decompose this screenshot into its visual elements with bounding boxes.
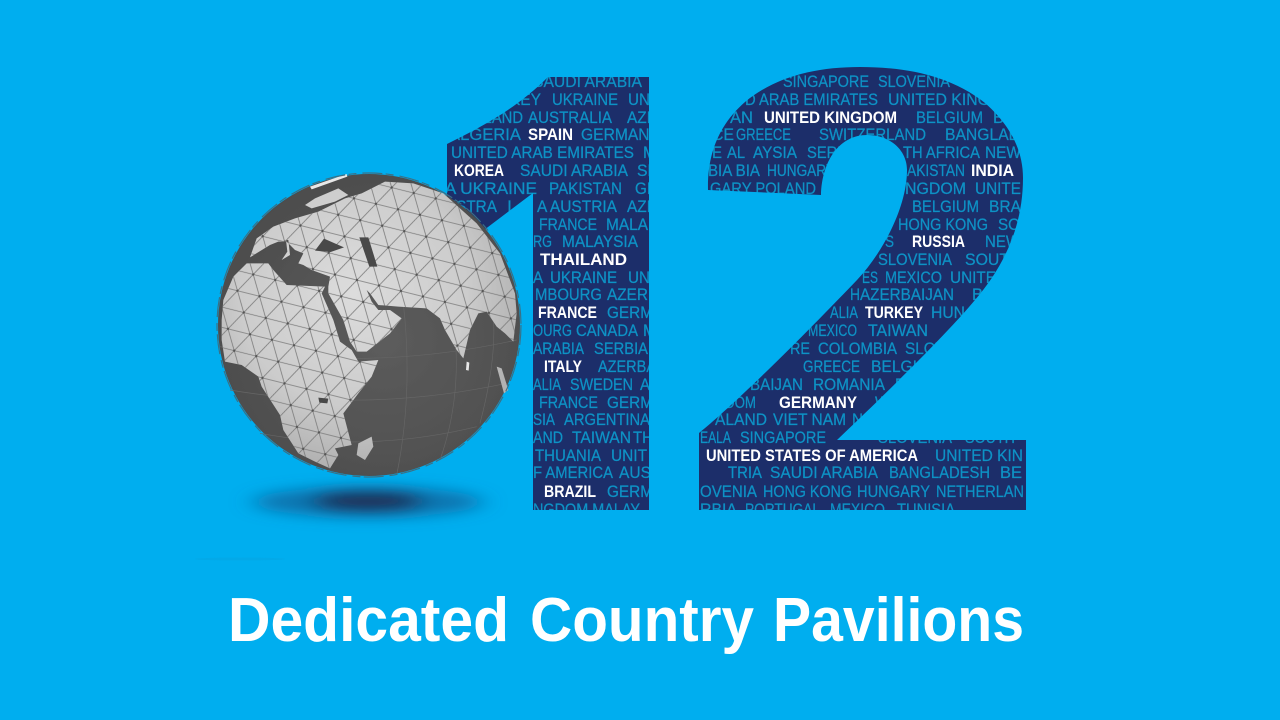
numeral 1 filled with country names: AZE — [627, 109, 657, 127]
numeral 2 filled with country names: SOUTH — [965, 429, 1015, 447]
numeral 2 filled with country names: NEW — [985, 233, 1020, 251]
numeral 1 filled with country names: FRANCE — [539, 394, 598, 412]
numeral 2 filled with country names: BANGLAD — [945, 126, 1020, 144]
numeral 2 filled with country names: SWITZERLAND — [819, 126, 926, 144]
numeral 2 filled with country names: BRA — [989, 198, 1021, 216]
numeral 1 filled with country names: RG — [533, 233, 552, 251]
numeral 1 filled with country names: M — [643, 144, 656, 162]
numeral 2 filled with country names: AN — [730, 109, 753, 127]
numeral 2 filled with country names: SLOVENIA — [878, 251, 952, 269]
numeral 2 filled with country names: SOUT — [965, 251, 1009, 269]
numeral 2 filled with country names: AYSIA — [753, 144, 797, 162]
numeral 1 filled with country names: CANADA — [576, 322, 638, 340]
numeral 2 filled with country names: GREECE — [736, 126, 791, 144]
numeral 2 filled with country names: SLOVENIA — [878, 429, 952, 447]
numeral 1 filled with country names: GERM — [607, 394, 653, 412]
numeral 2 filled with country names: PORTUGAL — [745, 501, 820, 519]
numeral 1 filled with country names: ALIA — [533, 376, 561, 394]
numeral 1 filled with country names: SERBIA — [594, 340, 648, 358]
numeral 1 filled with country names: TAIWAN — [572, 429, 631, 447]
numeral 2 filled with country names: MEXICO — [808, 322, 857, 340]
numeral 2 filled with country names: BELGIUM — [916, 109, 983, 127]
numeral 2 filled with country names: AKISTAN — [907, 162, 965, 180]
numeral 1 filled with country names: AZER — [607, 286, 648, 304]
numeral 1 filled with country names: AND — [533, 429, 563, 447]
globe — [217, 173, 521, 477]
numeral 1 filled with country names: FRANCE — [538, 304, 597, 322]
numeral 2 filled with country names: NGDOM — [905, 180, 966, 198]
numeral 1 filled with country names: FRANCE — [539, 216, 597, 234]
numeral 1 filled with country names: NGDOM MALAY — [533, 501, 640, 519]
numeral 2 filled with country names: UNITED KIN — [935, 447, 1023, 465]
numeral 2 filled with country names: SERBIA — [807, 144, 861, 162]
title — [228, 585, 1024, 655]
numeral 2 filled with country names: OVENIA — [700, 483, 757, 501]
numeral 2 filled with country names: BE — [1000, 464, 1022, 482]
numeral 2 filled with country names: TH AFRICA — [903, 144, 980, 162]
numeral 1 filled with country names: TH — [633, 429, 653, 447]
numeral 2 filled with country names: BELGI — [871, 358, 917, 376]
numeral 1 filled with country names: AUSTRALIA — [528, 109, 612, 127]
numeral 2 filled with country names: MEXICO — [885, 269, 942, 287]
numeral 2 filled with country names: UNITED KING — [888, 91, 990, 109]
numeral 1 filled with country names: GERMANY — [581, 126, 660, 144]
numeral 2 filled with country names: GERMANY — [779, 394, 857, 412]
numeral 2 filled with country names: CE — [712, 126, 734, 144]
numeral 2 filled with country names: TURKEY — [865, 304, 923, 322]
numeral 2 filled with country names: TAIWAN — [868, 322, 928, 340]
numeral 2 filled with country names: SINGAPORE — [740, 429, 826, 447]
numeral 1 filled with country names: UNIT — [611, 447, 647, 465]
numeral 1 filled with country names: AZE — [627, 198, 657, 216]
numeral 1 filled with country names: MALAYSIA — [562, 233, 638, 251]
numeral 1 filled with country names: GERM — [607, 483, 653, 501]
title: Pavilions — [773, 585, 1024, 655]
title: Country — [530, 585, 754, 655]
numeral 2 filled with country names: HUNGARY — [767, 162, 835, 180]
numeral 2 filled with country names: S — [885, 233, 894, 251]
numeral 2 filled with country names: BELGIUM — [912, 198, 979, 216]
numeral 2 filled with country names: RE — [790, 340, 810, 358]
numeral 1 filled with country names: THAILAND — [540, 251, 627, 269]
numeral 2 filled with country names: E — [712, 144, 722, 162]
numeral 2 filled with country names: AZERBAIJAN — [860, 286, 954, 304]
faint ground streak — [195, 558, 285, 560]
title: Dedicated — [228, 585, 509, 655]
numeral 1 filled with country names: UN — [628, 91, 650, 109]
numeral 1 filled with country names: MALA — [606, 216, 648, 234]
numeral 2 filled with country names: GARY POLAND — [710, 180, 816, 198]
numeral 2 filled with country names: SINGAPORE — [783, 73, 869, 91]
numeral 1 filled with country names: PAKISTAN — [549, 180, 622, 198]
numeral 1 filled with country names: THUANIA — [535, 447, 601, 465]
numeral 1 filled with country names: BRAZIL — [544, 483, 596, 501]
numeral 2 filled with country names: RUSSIA — [912, 233, 965, 251]
numeral 1 filled with country names: SAUDI ARABIA — [533, 73, 642, 91]
numeral 2 filled with country names: RBIA — [700, 501, 737, 519]
numeral 1 filled with country names: TURKEY — [478, 91, 541, 109]
numeral 1 filled with country names: SE — [637, 162, 658, 180]
numeral 2 filled with country names: R — [895, 376, 906, 394]
numeral 2 filled with country names: SLOV — [905, 340, 946, 358]
numeral 2 filled with country names: INDIA — [971, 162, 1014, 180]
numeral 2 filled with country names: HUN — [931, 304, 965, 322]
numeral 2 filled with country names: HONG KONG — [763, 483, 852, 501]
numeral 2 filled with country names: SO — [998, 216, 1020, 234]
numeral 2 filled with country names: SAUDI ARABIA — [770, 464, 878, 482]
numeral 1 filled with country names: IA UKRAINE — [440, 180, 537, 198]
numeral 1 filled with country names — [447, 77, 649, 510]
numeral 1 filled with country names: MBOURG — [535, 286, 602, 304]
numeral 2 filled with country names: N — [852, 411, 863, 429]
numeral 2 filled with country names: ALAND — [715, 411, 767, 429]
numeral 1 filled with country names: OURG — [533, 322, 572, 340]
numeral 2 filled with country names: BANGLADESH — [889, 464, 990, 482]
numeral 2 filled with country names: NEW — [985, 144, 1021, 162]
numeral 2 filled with country names: DOM — [725, 394, 756, 412]
numeral 2 filled with country names — [695, 60, 1030, 519]
numeral 1 filled with country names: UN — [628, 269, 650, 287]
numeral 2 filled with country names: H — [850, 286, 860, 304]
numeral 2 filled with country names: B — [993, 109, 1004, 127]
numeral 1 filled with country names: ARABIA — [533, 340, 584, 358]
numeral 2 filled with country names: UNITED STATES OF AMERICA — [706, 447, 918, 465]
numeral 2 filled with country names: UNITE — [975, 180, 1021, 198]
numeral 1 filled with country names: USTRA — [445, 198, 497, 216]
numeral 1 filled with country names: M — [643, 322, 656, 340]
numeral 1 filled with country names: ITALY — [544, 358, 582, 376]
numeral 1 filled with country names: I — [507, 198, 512, 216]
numeral 2 filled with country names: TUNISIA — [897, 501, 955, 519]
numeral 2 filled with country names: MEXICO — [830, 501, 885, 519]
numeral 1 filled with country names: UKRAINE — [552, 91, 618, 109]
numeral 1 filled with country names: A AUSTRIA — [537, 198, 617, 216]
numeral 2 filled with country names: B — [972, 286, 983, 304]
numeral 1 filled with country names: AUS — [619, 464, 651, 482]
numeral 1 filled with country names: UNITED ARAB EMIRATES — [451, 144, 634, 162]
numeral 2 filled with country names: HONG KONG — [898, 216, 988, 234]
numeral 1 filled with country names: SIA — [533, 411, 555, 429]
numeral 1 filled with country names: UKRAINE — [550, 269, 617, 287]
numeral 1 filled with country names: F AMERICA — [533, 464, 613, 482]
numeral 1 filled with country names: SWEDEN — [570, 376, 633, 394]
globe shadow — [253, 487, 483, 517]
numeral 2 filled with country names: AL — [727, 144, 745, 162]
numeral 2 filled with country names: TRIA — [728, 464, 762, 482]
numeral 1 filled with country names: THAILAND — [450, 109, 523, 127]
numeral 1 filled with country names: AZERBA — [598, 358, 656, 376]
numeral 2 filled with country names: NETHERLAN — [936, 483, 1024, 501]
numeral 1 filled with country names: A — [640, 376, 650, 394]
numeral 2 filled with country names: BIA BIA — [708, 162, 760, 180]
numeral 1 filled with country names: SPAIN — [528, 126, 573, 144]
numeral 2 filled with country names: HUNGARY — [857, 483, 930, 501]
numeral 1 filled with country names: GE — [635, 180, 657, 198]
numeral 1 filled with country names: KOREA — [454, 162, 504, 180]
numeral 2 filled with country names: COLOMBIA — [818, 340, 897, 358]
numeral 1 filled with country names: SAUDI ARABIA — [520, 162, 628, 180]
numeral 1 filled with country names: ALGERIA — [449, 126, 521, 144]
numeral 2 filled with country names: ALIA — [830, 304, 858, 322]
numeral 2 filled with country names: UNITE — [950, 269, 996, 287]
numeral 2 filled with country names: VIET NAM — [773, 411, 846, 429]
numeral 2 filled with country names: ES — [862, 269, 878, 287]
numeral 2 filled with country names: SLOVENIA — [878, 73, 950, 91]
numeral 2 filled with country names: BAIJAN — [750, 376, 803, 394]
numeral 2 filled with country names: W — [875, 394, 889, 412]
numeral 2 filled with country names: UNITED KINGDOM — [764, 109, 897, 127]
numeral 2 filled with country names: D ARAB EMIRATES — [745, 91, 878, 109]
numeral 1 filled with country names: GERM — [607, 304, 653, 322]
numeral 2 filled with country names: GREECE — [803, 358, 860, 376]
numeral 2 filled with country names: ROMANIA — [813, 376, 885, 394]
numeral 2 filled with country names: EALA — [700, 429, 731, 447]
numeral 1 filled with country names: ARGENTINA — [564, 411, 650, 429]
numeral 1 filled with country names: A — [533, 269, 543, 287]
